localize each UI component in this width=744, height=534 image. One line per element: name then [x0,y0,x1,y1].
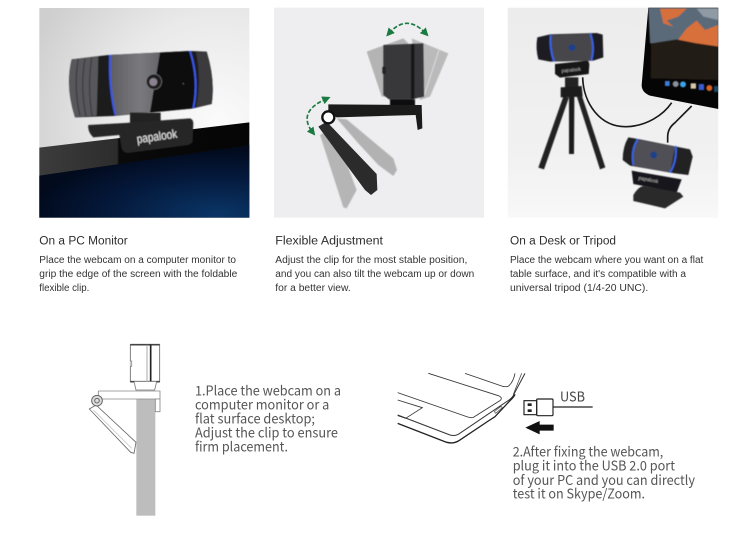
arrow pointing to port [525,421,554,434]
step 2 text [513,442,695,502]
clip leg [318,122,377,195]
hinge [322,111,334,123]
step 1 text: computer monitor or a [195,394,329,414]
text block: on a PC monitor: On a PC Monitor [39,236,128,248]
step 1 text: 1.Place the webcam on a [195,380,341,400]
ghost clip legs [320,118,397,208]
USB label: USB [560,387,585,406]
monitor [39,122,249,218]
text block: flexible adjustment: Adjust the clip for the most stable position, [275,255,467,266]
USB plug icon [524,399,593,416]
text block: on a PC monitor: Place the webcam on a computer monitor to [39,255,237,266]
clip arm [328,104,422,130]
text block: on a PC monitor: flexible clip. [39,283,89,294]
tripod webcam [537,33,603,78]
text block: on a desk or tripod: Place the webcam where you want on a flat [510,255,704,266]
tripod [538,77,605,169]
step 1 text: Adjust the clip to ensure [195,422,338,442]
clip with papalook logo: papalook [136,127,179,146]
text block: on a PC monitor [39,236,238,294]
desk webcam [623,137,693,208]
text block: on a desk or tripod [510,236,704,294]
text block: flexible adjustment: for a better view. [275,283,351,294]
step 2 text: test it on Skype/Zoom. [513,483,645,502]
cables [583,77,692,143]
step 1 text [195,380,341,456]
ghost tilted webcams [367,38,448,100]
text block: flexible adjustment: Flexible Adjustment [275,236,384,248]
step 2 text: 2.After fixing the webcam, [513,442,663,461]
webcam side view [382,43,424,106]
clip leg outline [89,405,136,453]
text block: flexible adjustment [275,236,474,294]
laptop outline [398,373,525,443]
panel: on a PC monitor photo [39,8,249,218]
monitor edge column [136,399,155,516]
webcam outline [130,345,160,390]
hinge [92,395,102,406]
webcam body [69,51,213,117]
clip arm outline [98,391,160,399]
step 1 text: flat surface desktop; [195,408,315,428]
text block: on a desk or tripod: universal tripod (1/4-20 UNC). [510,283,648,294]
diagram: webcam clipped on monitor [89,345,160,516]
green adjustment arrows [307,23,426,132]
panel: desk or tripod photo [508,8,719,218]
text block: on a desk or tripod: On a Desk or Tripod [510,236,616,248]
tripod webcam: papalook [561,67,582,74]
text block: on a desk or tripod: table surface, and it's compatible with a [510,269,687,280]
desk webcam: papalook [638,175,659,185]
clip with papalook logo [88,113,193,153]
step 2 text: of your PC and you can directly [513,470,695,489]
text block: on a PC monitor: grip the edge of the screen with the foldable [39,269,238,280]
display [642,8,719,109]
step 2 text: plug it into the USB 2.0 port [513,456,675,475]
panel: flexible adjustment photo [274,8,484,218]
text block: flexible adjustment: and you can also tilt the webcam up or down [275,269,474,280]
diagram: laptop with USB plug [398,373,593,443]
step 1 text: firm placement. [195,436,288,456]
